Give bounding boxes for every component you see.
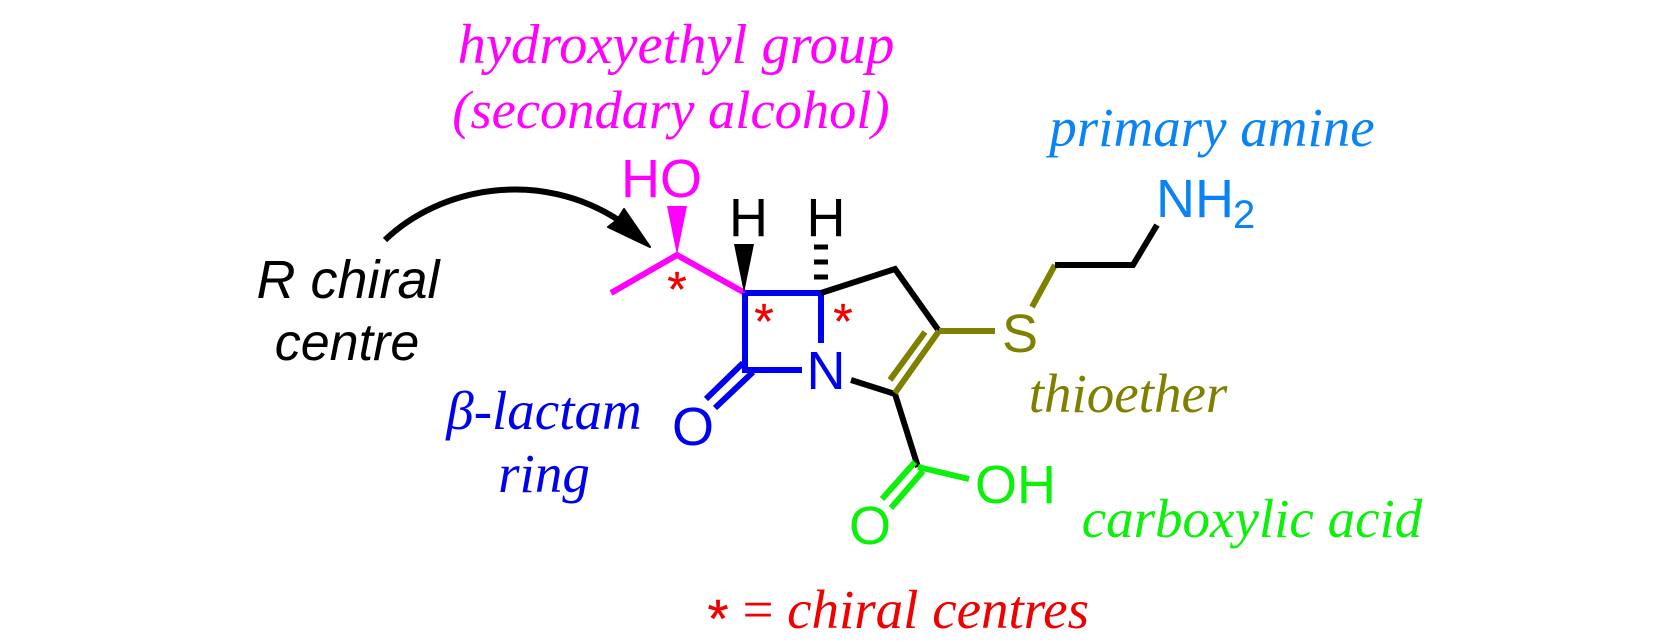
heading: R chiral centre label: centre [275, 314, 419, 372]
legend: chiral centres: = [739, 579, 776, 640]
thioether double bond and sulfur [890, 265, 1055, 393]
carboxylic acid group: OH [975, 455, 1056, 515]
stereo hydrogens [729, 188, 846, 293]
beta-lactam ring structure: N [806, 341, 846, 401]
heading: R chiral centre label: R chiral [256, 250, 442, 310]
heading: beta-lactam ring label: ring [498, 443, 590, 504]
legend: chiral centres: chiral centres [787, 579, 1089, 640]
chiral centre markers: * [667, 262, 687, 318]
heading: beta-lactam ring label [445, 380, 642, 504]
hydroxyethyl group structure: HO [621, 149, 702, 209]
amine group: NH [1156, 169, 1234, 229]
five-membered ring bonds [821, 269, 939, 467]
chiral centre markers: * [754, 294, 774, 350]
chiral centre markers: * [833, 294, 853, 350]
beta-lactam ring structure: O [672, 397, 714, 457]
amine group: 2 [1233, 193, 1255, 237]
beta-lactam ring structure [672, 293, 846, 457]
heading: hydroxyethyl group label: hydroxyethyl group [458, 14, 894, 76]
chiral centre markers [667, 262, 853, 350]
stereo hydrogens: H [729, 188, 768, 248]
hydroxyethyl group structure [611, 149, 745, 293]
ethyl chain bonds [1055, 225, 1157, 265]
arrow: R chiral centre to carbon [385, 189, 650, 247]
heading: hydroxyethyl group label: (secondary alcohol) [452, 79, 890, 140]
amine group [1156, 169, 1255, 237]
carboxylic acid group: O [849, 496, 891, 556]
stereo hydrogens: H [806, 188, 846, 248]
heading: primary amine label: primary amine [1045, 97, 1375, 158]
heading: hydroxyethyl group label [452, 14, 894, 140]
heading: R chiral centre label [256, 250, 442, 372]
thioether double bond and sulfur: S [1002, 304, 1038, 364]
heading: carboxylic acid label: carboxylic acid [1082, 488, 1423, 549]
heading: beta-lactam ring label: β-lactam [445, 380, 642, 441]
carboxylic acid group [849, 455, 1056, 556]
heading: thioether label: thioether [1029, 363, 1228, 424]
